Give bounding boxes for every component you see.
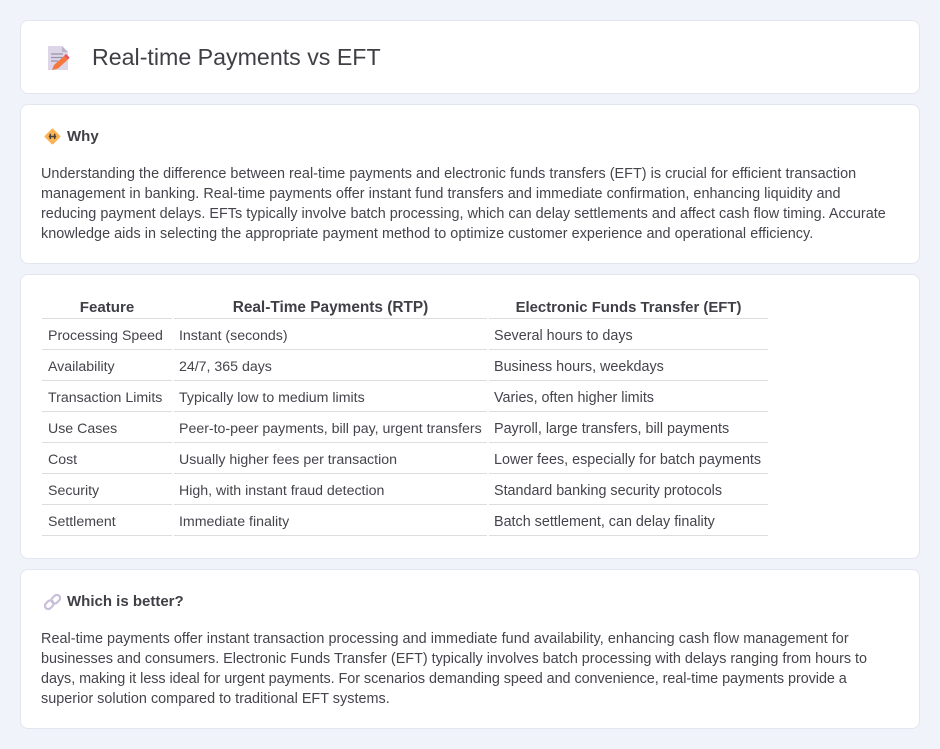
comparison table: Several hours to days — [494, 328, 633, 344]
panel: header — [20, 20, 920, 94]
comparison table: Real-Time Payments (RTP) — [233, 298, 428, 316]
comparison table: Usually higher fees per transaction — [179, 452, 397, 468]
comparison table: Immediate finality — [179, 514, 289, 530]
comparison table: Batch settlement, can delay finality — [494, 514, 715, 530]
comparison table: High, with instant fraud detection — [179, 483, 384, 499]
comparison table: Feature — [80, 298, 134, 316]
comparison table: 24/7, 365 days — [179, 359, 272, 375]
heading: why: Why — [67, 128, 99, 145]
icon: chain link — [44, 594, 61, 610]
comparison table: Settlement — [48, 514, 116, 530]
comparison table: Cost — [48, 452, 77, 468]
icon: warning diamond — [44, 128, 60, 144]
heading: which is better: Which is better? — [67, 593, 184, 610]
comparison table: Payroll, large transfers, bill payments — [494, 421, 729, 437]
text block: why: knowledge aids in selecting the appropriate payment method to optimize customer experience and operational efficiency. — [41, 226, 813, 242]
comparison table: Use Cases — [48, 421, 117, 437]
text block: why — [41, 166, 886, 242]
comparison table: Instant (seconds) — [179, 328, 288, 344]
panel: which is better — [20, 569, 920, 729]
comparison table: Security — [48, 483, 99, 499]
comparison table: Processing Speed — [48, 328, 163, 344]
comparison table: Standard banking security protocols — [494, 483, 722, 499]
title: Real-time Payments vs EFT — [92, 44, 381, 70]
panel: comparison table — [20, 274, 920, 559]
text block: why: Understanding the difference between real-time payments and electronic funds transfers (EFT) is crucial for efficient transaction — [41, 166, 856, 182]
comparison table: Electronic Funds Transfer (EFT) — [516, 300, 741, 316]
comparison table: Varies, often higher limits — [494, 390, 654, 406]
text block: why: management in banking. Real-time payments offer instant fund transfers and immediate confirmation, enhancing liquidity and — [41, 186, 841, 202]
text block: which is better: superior solution compared to traditional EFT systems. — [41, 691, 390, 707]
text block: why: reducing payment delays. EFTs typically involve batch processing, which can delay settlements and affect cash flow timing. Accurate — [41, 206, 886, 222]
comparison table: Lower fees, especially for batch payments — [494, 452, 761, 468]
panel: why — [20, 104, 920, 264]
comparison table: Business hours, weekdays — [494, 359, 664, 375]
text block: which is better — [41, 631, 867, 707]
comparison table: Peer-to-peer payments, bill pay, urgent transfers — [179, 421, 482, 437]
icon: document with pencil — [48, 46, 70, 70]
text block: which is better: Real-time payments offer instant transaction processing and immediate fund availability, enhancing cash flow management for — [41, 631, 849, 647]
comparison table: Availability — [48, 359, 115, 375]
comparison table: Typically low to medium limits — [179, 390, 365, 406]
text block: which is better: days, making it less ideal for urgent payments. For scenarios demanding speed and convenience, real-time payments provide a — [41, 671, 847, 687]
text block: which is better: businesses and consumers. Electronic Funds Transfer (EFT) typically involves batch processing with delays ranging from hours to — [41, 651, 867, 667]
comparison table: Transaction Limits — [48, 390, 162, 406]
comparison table — [42, 298, 768, 536]
